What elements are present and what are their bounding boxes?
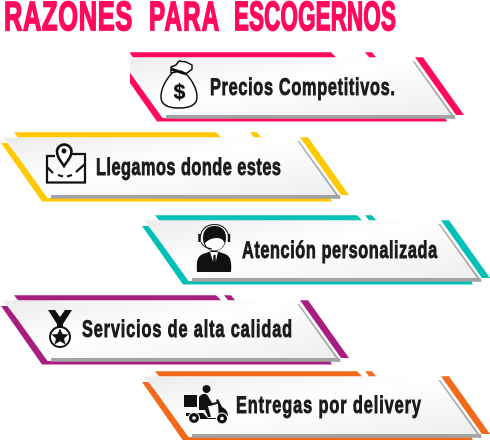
label: atencion personalizada: Atención personalizada bbox=[242, 237, 438, 264]
icon: money bag: $ bbox=[174, 81, 186, 104]
label: servicios de alta calidad: Servicios de alta calidad bbox=[82, 316, 292, 343]
panel: servicios de alta calidad bbox=[1, 295, 349, 364]
icon: headset agent bbox=[197, 224, 231, 272]
panel: llegamos donde estes bbox=[1, 132, 349, 202]
icon: money bag bbox=[161, 61, 197, 108]
label: entregas por delivery: Entregas por delivery bbox=[236, 392, 421, 419]
icon: medal bbox=[48, 310, 72, 347]
panel: entregas por delivery bbox=[142, 371, 490, 440]
icon: map pin bbox=[47, 145, 85, 182]
title bbox=[4, 0, 396, 40]
panel: precios competitivos bbox=[116, 52, 464, 122]
label: llegamos donde estes: Llegamos donde estes bbox=[96, 154, 281, 181]
panel: atencion personalizada bbox=[142, 215, 490, 284]
label: precios competitivos: Precios Competitivos. bbox=[210, 74, 395, 101]
icon: delivery scooter bbox=[184, 385, 228, 424]
